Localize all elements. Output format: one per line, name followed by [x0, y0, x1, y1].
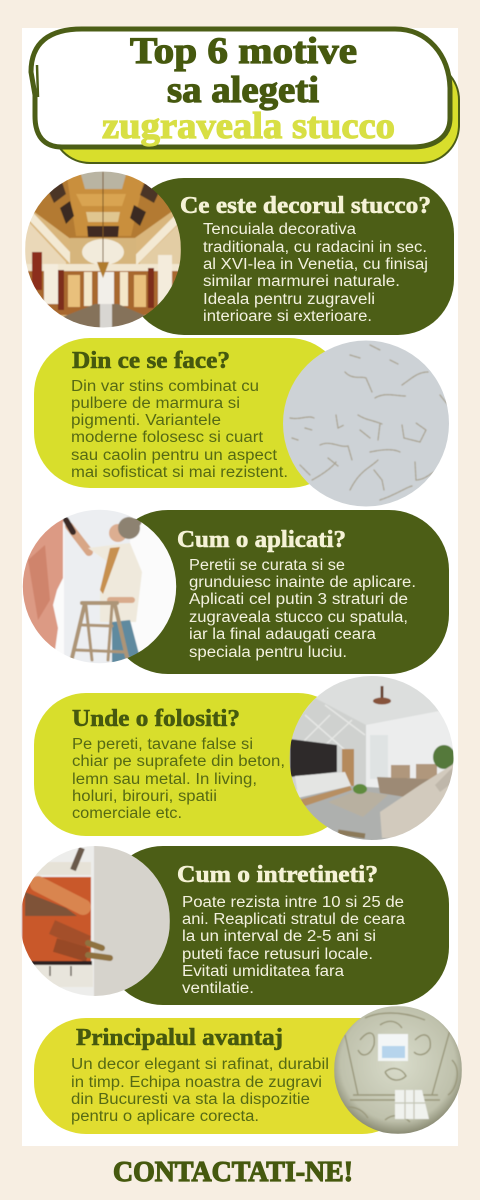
icon: living room photo: [289, 675, 456, 841]
call to action: CONTACTATI-NE!: [113, 1157, 353, 1188]
heading: Ce este decorul stucco?: [180, 193, 431, 219]
title: [102, 31, 395, 147]
body text: Pe pereti, tavane false si: [72, 736, 253, 753]
body text: mai sofisticat si mai rezistent.: [71, 464, 288, 481]
body text: similar marmurei naturale.: [203, 273, 400, 290]
body text: ventilatie.: [182, 980, 254, 997]
header banner: [31, 29, 459, 163]
body text: [71, 1056, 329, 1125]
body text: grunduiesc inainte de aplicare.: [189, 574, 416, 591]
heading: Unde o folositi?: [72, 706, 240, 732]
body text: Aplicati cel putin 3 straturi de: [189, 591, 408, 608]
body text: Din var stins combinat cu: [71, 378, 259, 395]
panel: principalul avantaj: [34, 1006, 462, 1134]
body text: in timp. Echipa noastra de zugravi: [71, 1074, 322, 1091]
body text: chiar pe suprafete din beton,: [72, 753, 285, 770]
body text: holuri, birouri, spatii: [72, 788, 217, 805]
panel: din ce se face: [34, 338, 449, 507]
title: zugraveala stucco: [102, 106, 395, 147]
body text: din Bucuresti va sta la dispozitie: [71, 1091, 310, 1108]
heading: Cum o aplicati?: [177, 527, 346, 553]
body text: traditionala, cu radacini in sec.: [203, 239, 427, 256]
panel: unde o folositi: [34, 675, 456, 841]
panel: ce este decorul stucco: [25, 171, 454, 335]
body text: Evitati umiditatea fara: [182, 963, 344, 980]
body text: Peretii se curata si se: [189, 557, 345, 574]
body text: al XVI-lea in Venetia, cu finisaj: [203, 256, 428, 273]
icon: painter on ladder photo: [22, 509, 178, 665]
body text: [203, 221, 428, 325]
body text: la un interval de 2-5 ani si: [182, 928, 376, 945]
body text: Poate rezista intre 10 si 25 de: [182, 894, 404, 911]
title: sa alegeti: [167, 70, 319, 111]
heading: Principalul avantaj: [76, 1025, 283, 1051]
body text: [189, 557, 416, 661]
body text: lemn sau metal. In living,: [72, 771, 257, 788]
icon: stucco texture photo: [283, 340, 449, 507]
panel: cum o intretineti: [20, 845, 449, 1005]
body text: pigmenti. Variantele: [71, 412, 221, 429]
body text: sau caolin pentru un aspect: [71, 447, 278, 464]
heading: Cum o intretineti?: [177, 862, 378, 888]
body text: Tencuiala decorativa: [203, 221, 356, 238]
body text: [72, 736, 285, 822]
body text: pentru o aplicare corecta.: [71, 1108, 259, 1125]
body text: pulbere de marmura si: [71, 395, 240, 412]
body text: [71, 378, 288, 481]
body text: comerciale etc.: [72, 805, 182, 822]
body text: zugraveala stucco cu spatula,: [189, 609, 408, 626]
heading: Din ce se face?: [72, 348, 230, 374]
body text: moderne folosesc si cuart: [71, 429, 264, 446]
body text: iar la final adaugati ceara: [189, 626, 376, 643]
title: Top 6 motive: [130, 31, 357, 72]
body text: [182, 894, 405, 997]
body text: puteti face retusuri locale.: [182, 946, 373, 963]
body text: speciala pentru luciu.: [189, 644, 347, 661]
body text: Un decor elegant si rafinat, durabil: [71, 1056, 329, 1073]
icon: paint roller and brushes photo: [20, 845, 170, 998]
icon: palace hall photo: [25, 171, 181, 330]
body text: Ideala pentru zugraveli: [203, 291, 375, 308]
body text: interioare si exterioare.: [203, 308, 372, 325]
panel: cum o aplicati: [22, 509, 449, 674]
icon: ornate ceiling photo: [334, 1006, 462, 1134]
body text: ani. Reaplicati stratul de ceara: [182, 911, 405, 928]
